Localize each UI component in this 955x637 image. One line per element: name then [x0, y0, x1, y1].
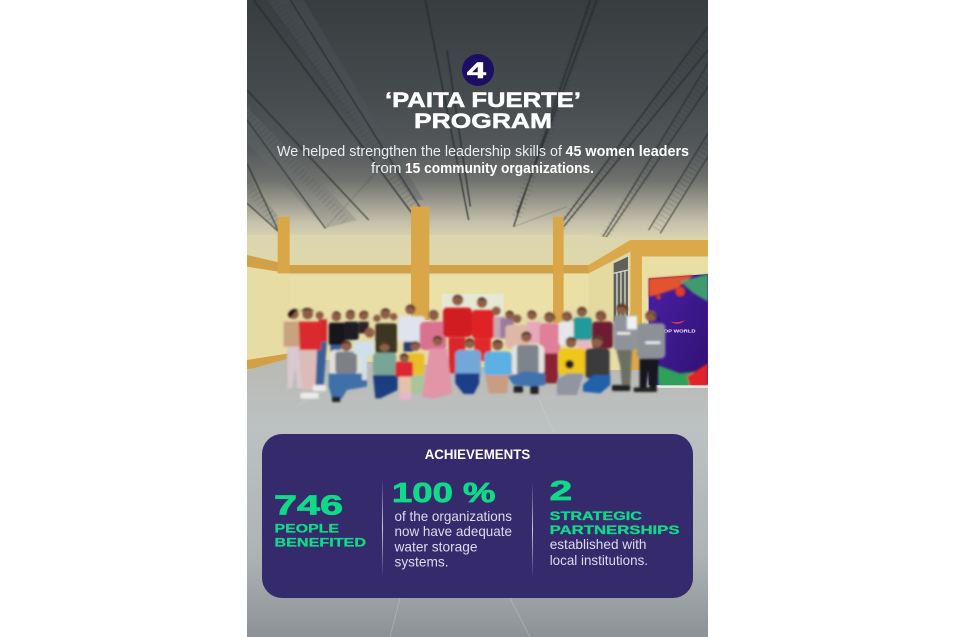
back row heads — [289, 295, 657, 323]
back row hair — [288, 295, 660, 322]
floor cracks — [299, 385, 555, 637]
shoes — [300, 383, 328, 400]
intro text: from — [371, 161, 402, 177]
stat: 2 strategic partnerships: established with — [550, 536, 646, 552]
floor — [247, 358, 708, 637]
banner — [649, 274, 708, 388]
stat: 100% of organizations: 100 % — [392, 477, 496, 508]
stat: 746 people benefited — [274, 490, 366, 550]
front row bodies — [330, 350, 362, 377]
stat: 2 strategic partnerships: STRATEGIC — [550, 509, 642, 523]
panel heading: ACHIEVEMENTS — [425, 447, 530, 462]
roof trusses — [247, 0, 708, 238]
horizontal beam — [247, 255, 589, 273]
title: PROGRAM — [414, 110, 552, 133]
stat: 746 people benefited: BENEFITED — [274, 536, 366, 550]
banner logo — [670, 320, 685, 324]
ceiling — [247, 0, 708, 240]
stat: 100% of organizations: systems. — [394, 554, 448, 570]
wall panels — [247, 267, 290, 276]
whiteboard — [442, 294, 504, 321]
rear wall — [247, 235, 630, 377]
number badge: 4 — [467, 58, 487, 83]
intro text: 15 community organizations. — [405, 161, 594, 177]
right wall beam and frame — [589, 240, 708, 373]
title — [385, 89, 581, 133]
banner: OP WORLD — [664, 329, 696, 334]
intro text: 45 women leaders — [566, 144, 689, 160]
front row heads — [341, 328, 603, 363]
title: ‘PAITA FUERTE’ — [385, 89, 581, 112]
stat: 2 strategic partnerships: 2 — [550, 475, 572, 506]
intro text — [277, 144, 689, 177]
stat: 2 strategic partnerships — [550, 475, 680, 568]
stat: 2 strategic partnerships: PARTNERSHIPS — [550, 523, 680, 537]
stat: 100% of organizations: now have adequate — [394, 523, 512, 539]
panel: achievements — [262, 434, 693, 598]
front row hair — [341, 332, 603, 357]
stat: 100% of organizations: of the organizations — [394, 508, 512, 524]
banner top artwork — [649, 274, 708, 387]
stat: 2 strategic partnerships: local institutions. — [550, 552, 648, 568]
back row bodies — [284, 322, 300, 347]
group of people — [284, 295, 665, 402]
orange pillars — [278, 207, 564, 323]
stat: 746 people benefited: PEOPLE — [274, 522, 339, 536]
stat: 100% of organizations: water storage — [394, 539, 478, 555]
background photo: group in warehouse — [247, 0, 708, 637]
baseboard — [247, 353, 289, 369]
number badge — [462, 54, 494, 86]
stat: 100% of organizations — [392, 477, 512, 570]
stat: 746 people benefited: 746 — [274, 490, 343, 520]
walls and beams — [247, 207, 708, 377]
intro text: We helped strengthen the leadership skills of — [277, 144, 563, 160]
window — [614, 257, 628, 322]
